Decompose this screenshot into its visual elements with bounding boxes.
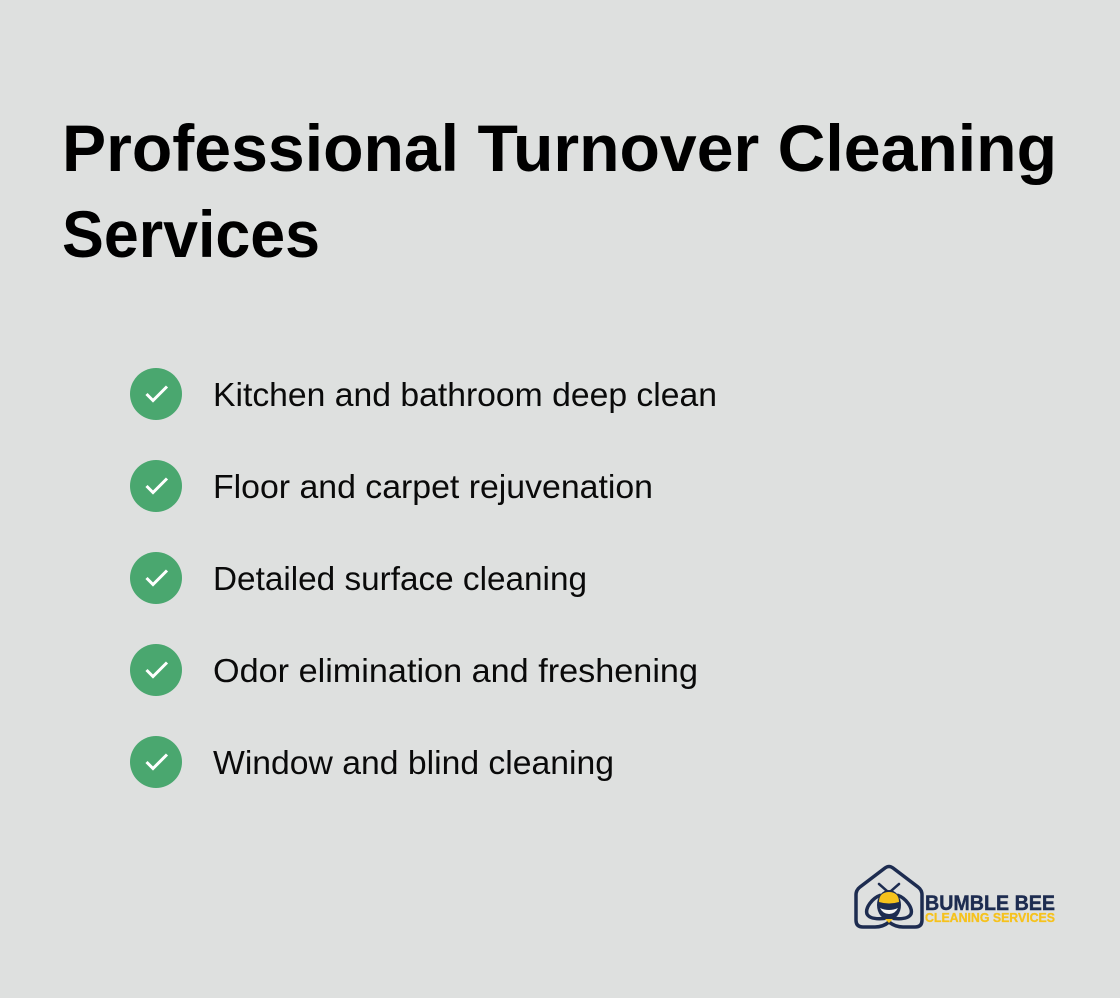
- icon: bee in house: [856, 866, 922, 927]
- item: floor and carpet: Floor and carpet rejuvenation: [213, 468, 653, 505]
- logo: [856, 866, 1055, 927]
- item: kitchen and bathroom: Kitchen and bathroom deep clean: [213, 376, 717, 413]
- logo tagline: CLEANING SERVICES: [925, 911, 1055, 925]
- item: kitchen and bathroom: [130, 368, 717, 420]
- item: detailed surface: Detailed surface cleaning: [213, 560, 587, 597]
- logo wordmark: BUMBLE BEE: [925, 892, 1055, 915]
- item: odor elimination: [130, 644, 698, 696]
- item: detailed surface: [130, 552, 587, 604]
- checklist: [130, 368, 717, 788]
- title: Professional Turnover Cleaning: [62, 111, 1057, 185]
- title: Services: [62, 197, 320, 271]
- title: [62, 111, 1057, 271]
- item: odor elimination: Odor elimination and freshening: [213, 652, 698, 689]
- item: floor and carpet: [130, 460, 653, 512]
- item: window and blind: Window and blind cleaning: [213, 744, 614, 781]
- item: window and blind: [130, 736, 614, 788]
